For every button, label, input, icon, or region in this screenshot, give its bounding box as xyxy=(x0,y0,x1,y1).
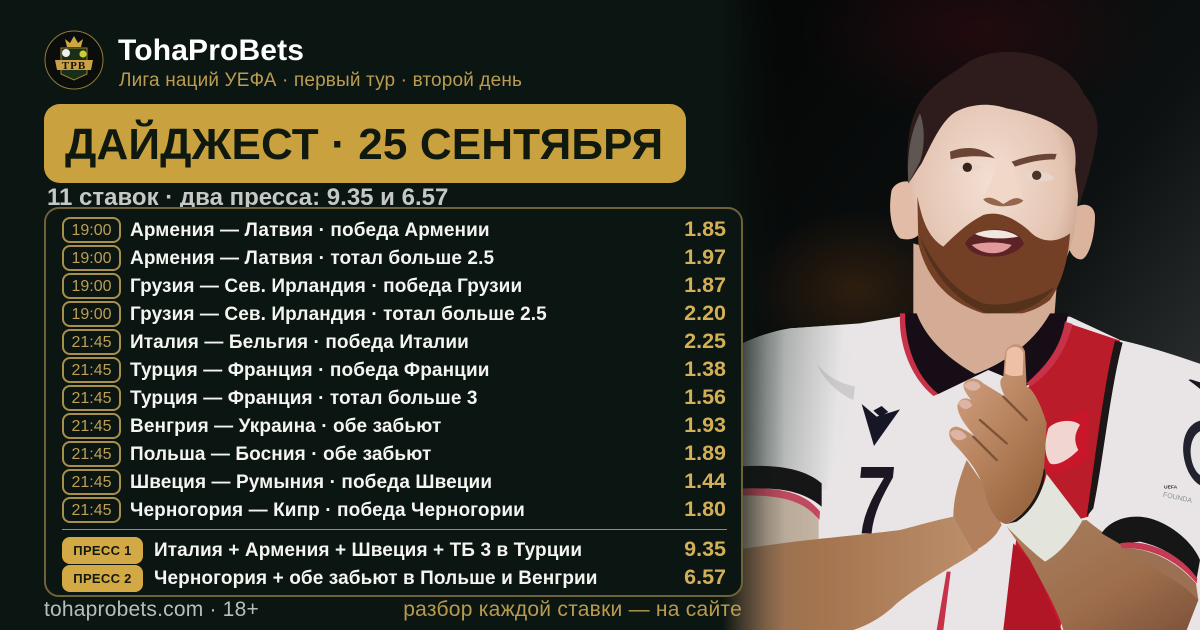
bet row 1: 1.85 xyxy=(684,217,726,241)
collar, hands and wrist tape xyxy=(900,313,1082,562)
bet row 4 xyxy=(62,301,726,327)
bet row 3: Грузия — Сев. Ирландия · победа Грузии xyxy=(130,276,522,297)
footer: site and age limit: tohaprobets.com · 18+ xyxy=(44,598,259,621)
shirt and arms: 7 xyxy=(850,445,899,554)
bet row 11 xyxy=(62,497,726,523)
bet row 11: Черногория — Кипр · победа Черногории xyxy=(130,500,525,521)
parlay row 1: 9.35 xyxy=(684,537,726,561)
title banner: ДАЙДЖЕСТ · 25 СЕНТЯБРЯ xyxy=(65,120,663,169)
bet row 8: Венгрия — Украина · обе забьют xyxy=(130,416,441,437)
bet row 9 xyxy=(62,441,726,467)
bet row 10: 1.44 xyxy=(684,469,726,493)
bet row 11: 1.80 xyxy=(684,497,726,521)
bet row 9: 21:45 xyxy=(71,446,112,463)
bet row 4: 19:00 xyxy=(71,306,112,323)
bet row 5 xyxy=(62,329,726,355)
subtitle: Лига наций УЕФА · первый тур · второй день xyxy=(119,70,522,91)
parlay row 2: 6.57 xyxy=(684,565,726,589)
bet row 11: 21:45 xyxy=(71,502,112,519)
brand name: TohaProBets xyxy=(118,34,304,67)
bet row 1 xyxy=(62,217,726,243)
bet row 1: Армения — Латвия · победа Армении xyxy=(130,220,490,241)
bet row 4: Грузия — Сев. Ирландия · тотал больше 2.5 xyxy=(130,304,547,325)
bet row 4: 2.20 xyxy=(684,301,726,325)
bet row 8: 1.93 xyxy=(684,413,726,437)
bet row 9: Польша — Босния · обе забьют xyxy=(130,444,431,465)
bet row 3 xyxy=(62,273,726,299)
bet row 8 xyxy=(62,413,726,439)
bet row 5: 2.25 xyxy=(684,329,726,353)
bet row 2 xyxy=(62,245,726,271)
bet row 6: 21:45 xyxy=(71,362,112,379)
bet row 7: 1.56 xyxy=(684,385,726,409)
bet row 2: 1.97 xyxy=(684,245,726,269)
bet row 2: Армения — Латвия · тотал больше 2.5 xyxy=(130,248,494,269)
bet row 3: 19:00 xyxy=(71,278,112,295)
shirt and arms: UEFA xyxy=(1164,484,1178,490)
footer: call to action: разбор каждой ставки — на сайте xyxy=(403,598,742,621)
bet row 6 xyxy=(62,357,726,383)
bet row 6: 1.38 xyxy=(684,357,726,381)
logo: TPB round badge xyxy=(44,30,104,90)
bet row 5: 21:45 xyxy=(71,334,112,351)
shirt and arms: FOUNDA xyxy=(1162,492,1193,505)
summary line: 11 ставок · два пресса: 9.35 и 6.57 xyxy=(47,184,448,211)
title banner xyxy=(44,104,686,183)
bet row 7: 21:45 xyxy=(71,390,112,407)
parlay row 1: Италия + Армения + Швеция + ТБ 3 в Турции xyxy=(154,540,582,561)
bet row 10 xyxy=(62,469,726,495)
bet row 5: Италия — Бельгия · победа Италии xyxy=(130,332,469,353)
bet row 1: 19:00 xyxy=(71,222,112,239)
parlay row 2: ПРЕСС 2 xyxy=(73,571,132,586)
left fade over photo xyxy=(700,0,785,630)
bet row 10: Швеция — Румыния · победа Швеции xyxy=(130,472,492,493)
bet row 6: Турция — Франция · победа Франции xyxy=(130,360,490,381)
bet row 8: 21:45 xyxy=(71,418,112,435)
bet row 2: 19:00 xyxy=(71,250,112,267)
parlay row 2 xyxy=(62,565,726,592)
bet row 7 xyxy=(62,385,726,411)
bet row 10: 21:45 xyxy=(71,474,112,491)
logo: TPB round badge: TPB xyxy=(62,60,86,72)
bet row 3: 1.87 xyxy=(684,273,726,297)
panel: bets list frame xyxy=(44,206,743,596)
parlay row 1 xyxy=(62,537,726,564)
shirt and arms xyxy=(717,317,1200,630)
parlay row 2: Черногория + обе забьют в Польше и Венгрии xyxy=(154,568,598,589)
parlay row 1: ПРЕСС 1 xyxy=(73,543,132,558)
bet row 9: 1.89 xyxy=(684,441,726,465)
head and face xyxy=(890,52,1098,330)
bet row 7: Турция — Франция · тотал больше 3 xyxy=(130,388,478,409)
